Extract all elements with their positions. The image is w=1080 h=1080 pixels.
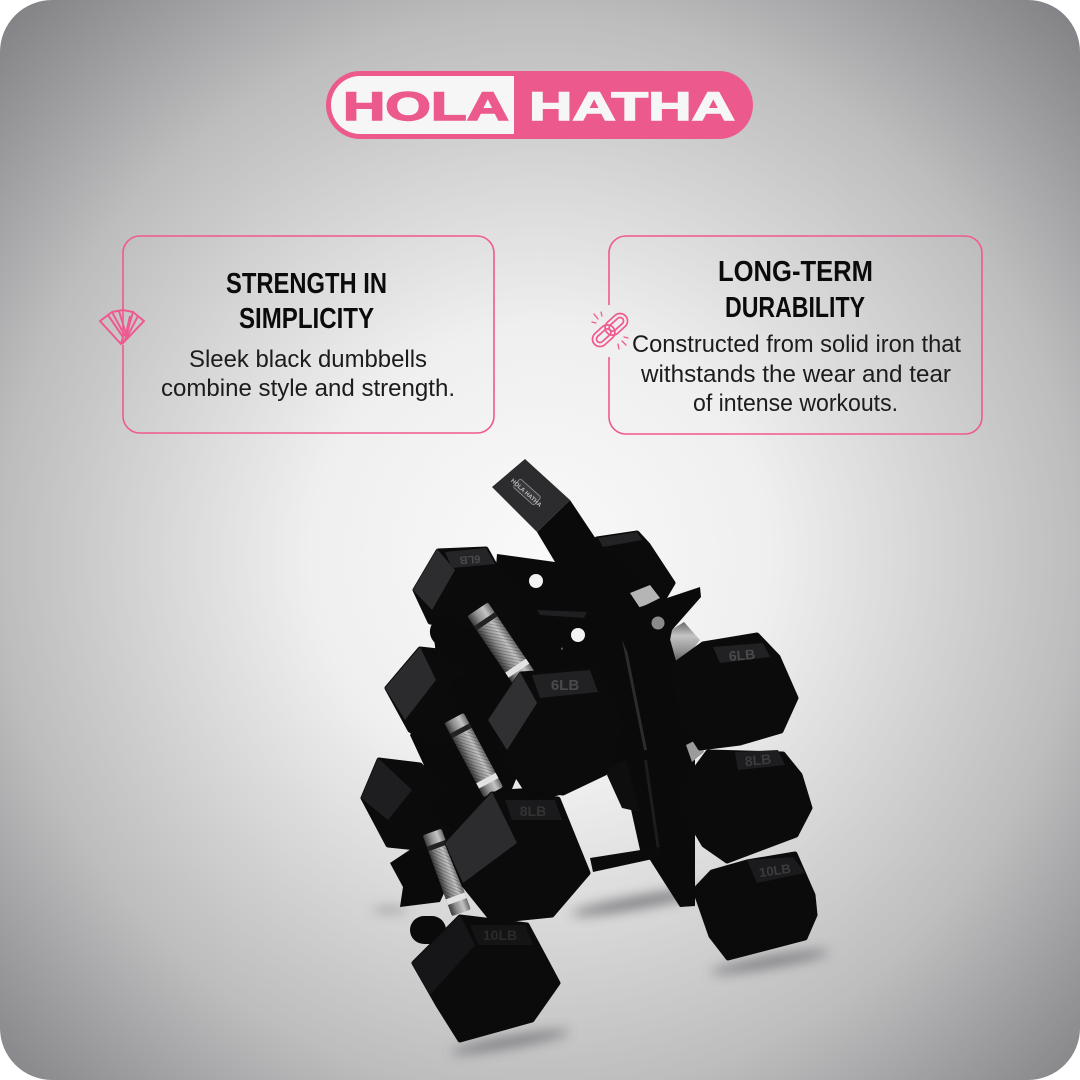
- floor shadows: [372, 884, 830, 1057]
- dumbbell: back left 6LB: [413, 548, 520, 640]
- logo: Hola Hatha: [326, 71, 753, 139]
- heading: durability: DURABILITY: [725, 292, 865, 324]
- dumbbell: front 8LB: [445, 792, 588, 921]
- dumbbell: back left 10LB: [361, 758, 450, 848]
- dumbbell: front 6LB: [488, 669, 620, 793]
- dumbbell rack product illustration: [361, 459, 830, 1057]
- dumbbell: right 6LB: 6LB: [728, 646, 756, 664]
- dumbbell: back left 8LB: [385, 647, 480, 743]
- heading: strength in simplicity: STRENGTH IN: [226, 268, 387, 300]
- dumbbell: right 10LB: [695, 854, 815, 958]
- rack: left frame and foot: [390, 610, 625, 907]
- dumbbell: right 6LB: [674, 635, 796, 748]
- chrome handle: lower: [423, 829, 471, 916]
- logo: Hola Hatha: HOLA: [343, 85, 509, 129]
- back dumbbell head: top right: [597, 533, 673, 605]
- body line 3: of intense workouts.: [693, 390, 898, 417]
- panel: long-term durability: [589, 236, 982, 434]
- rack: central frame mass: [490, 500, 695, 907]
- chrome handle: top: [467, 602, 535, 686]
- rack: back leg: [607, 755, 640, 812]
- rack: upright highlights: [537, 610, 660, 850]
- dumbbell: front 10LB: [412, 915, 558, 1040]
- body line 2: withstands the wear and tear: [640, 361, 951, 388]
- heading: long-term: LONG-TERM: [718, 256, 873, 288]
- icon: chain link: [589, 310, 631, 350]
- rack: plate holes: [529, 574, 585, 667]
- panel: strength in simplicity: [100, 236, 494, 433]
- rack: top bracket face: HOLA HATHA: [509, 478, 543, 509]
- body line 2: combine style and strength.: [161, 375, 455, 402]
- chrome handle: middle: [444, 713, 503, 797]
- rack: crossbar: [590, 847, 662, 872]
- dumbbell: right 8LB: [680, 738, 810, 861]
- dumbbell: right back handle: [630, 585, 700, 668]
- rack: right bracket: [622, 587, 701, 680]
- heading line 2: SIMPLICITY: [239, 303, 374, 335]
- dumbbell: right 10LB: 10LB: [758, 861, 792, 880]
- body line 1: Constructed from solid iron that: [632, 331, 961, 358]
- dumbbell: front 8LB: 8LB: [520, 803, 546, 819]
- logo: Hola Hatha: HATHA: [529, 85, 735, 129]
- rack: top bracket face: [492, 459, 570, 532]
- body line 1: Sleek black dumbbells: [189, 346, 427, 373]
- dumbbell: front 10LB: 10LB: [483, 927, 517, 943]
- dumbbell: right 8LB: 8LB: [744, 751, 772, 769]
- dumbbell: front 6LB: 6LB: [551, 677, 579, 694]
- icon: diamond fan: [100, 310, 144, 344]
- back dumbbell plate: [598, 532, 642, 547]
- handle caps: [410, 610, 500, 944]
- dumbbell: back left 6LB: 6LB: [459, 552, 481, 566]
